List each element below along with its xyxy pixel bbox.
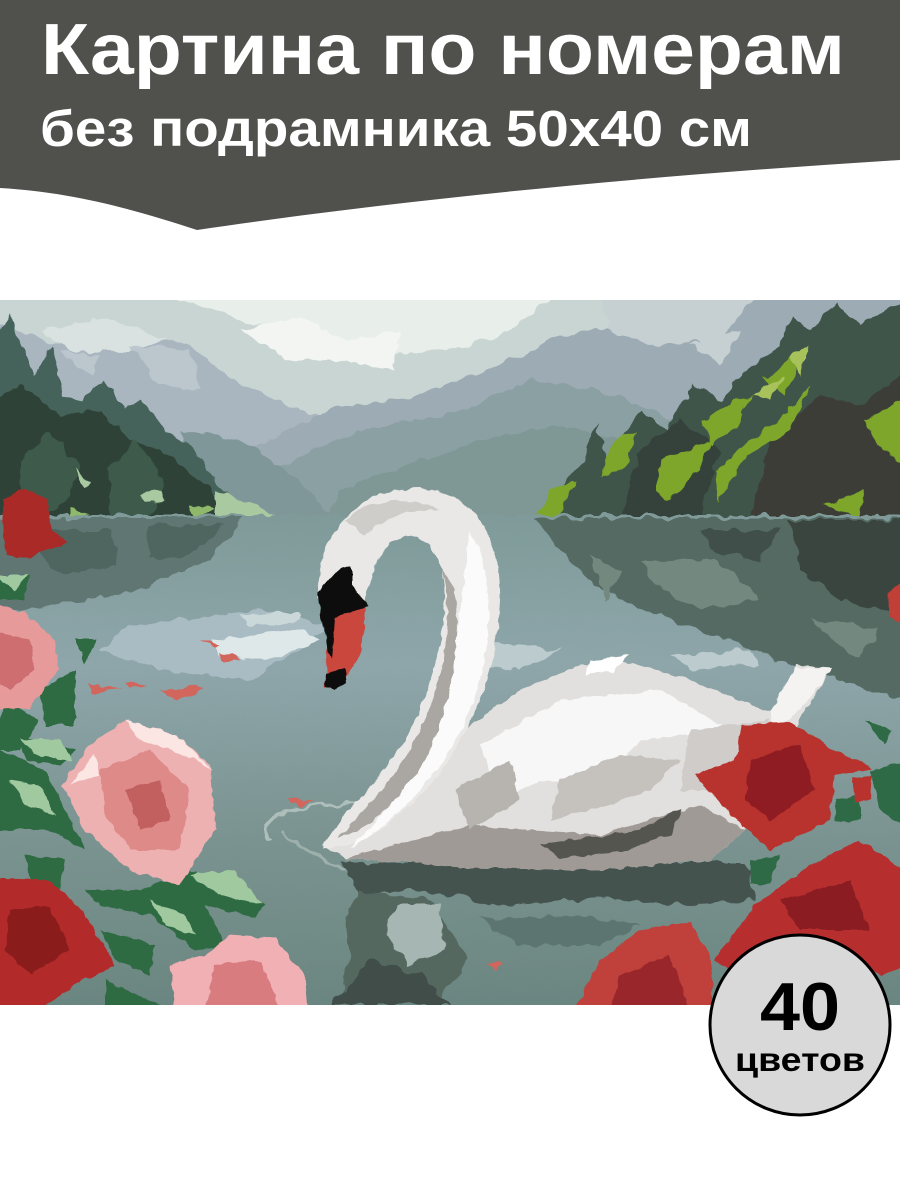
swan beak [325,604,366,688]
swan [318,488,832,870]
right forest [535,295,900,520]
rose red bottom center [575,922,712,1010]
lake [0,515,900,1015]
painting: swan on a lake with roses [0,290,900,1015]
swan neck and head [318,488,500,848]
left forest [0,315,280,520]
header banner [0,0,900,230]
rose small right [852,775,872,802]
rose pink bottom [170,935,308,1010]
subtitle: без подрамника 50х40 см [40,100,752,157]
rose red bottom left [0,878,115,1010]
swan body [322,660,832,870]
badge number: 40 [760,969,840,1045]
sky and mountains [0,290,900,530]
roses and leaves [0,488,900,1010]
rose pink large [62,720,215,885]
rose far right [888,584,900,622]
rose pink left [0,603,58,710]
badge label: цветов [735,1041,865,1078]
rose right [695,722,872,850]
rose red bottom right [715,840,900,975]
leaves left [0,575,265,1010]
rose top left [2,488,68,558]
leaves right [750,720,900,885]
badge: 40 colours [710,935,890,1115]
title: Картина по номерам [41,10,845,90]
